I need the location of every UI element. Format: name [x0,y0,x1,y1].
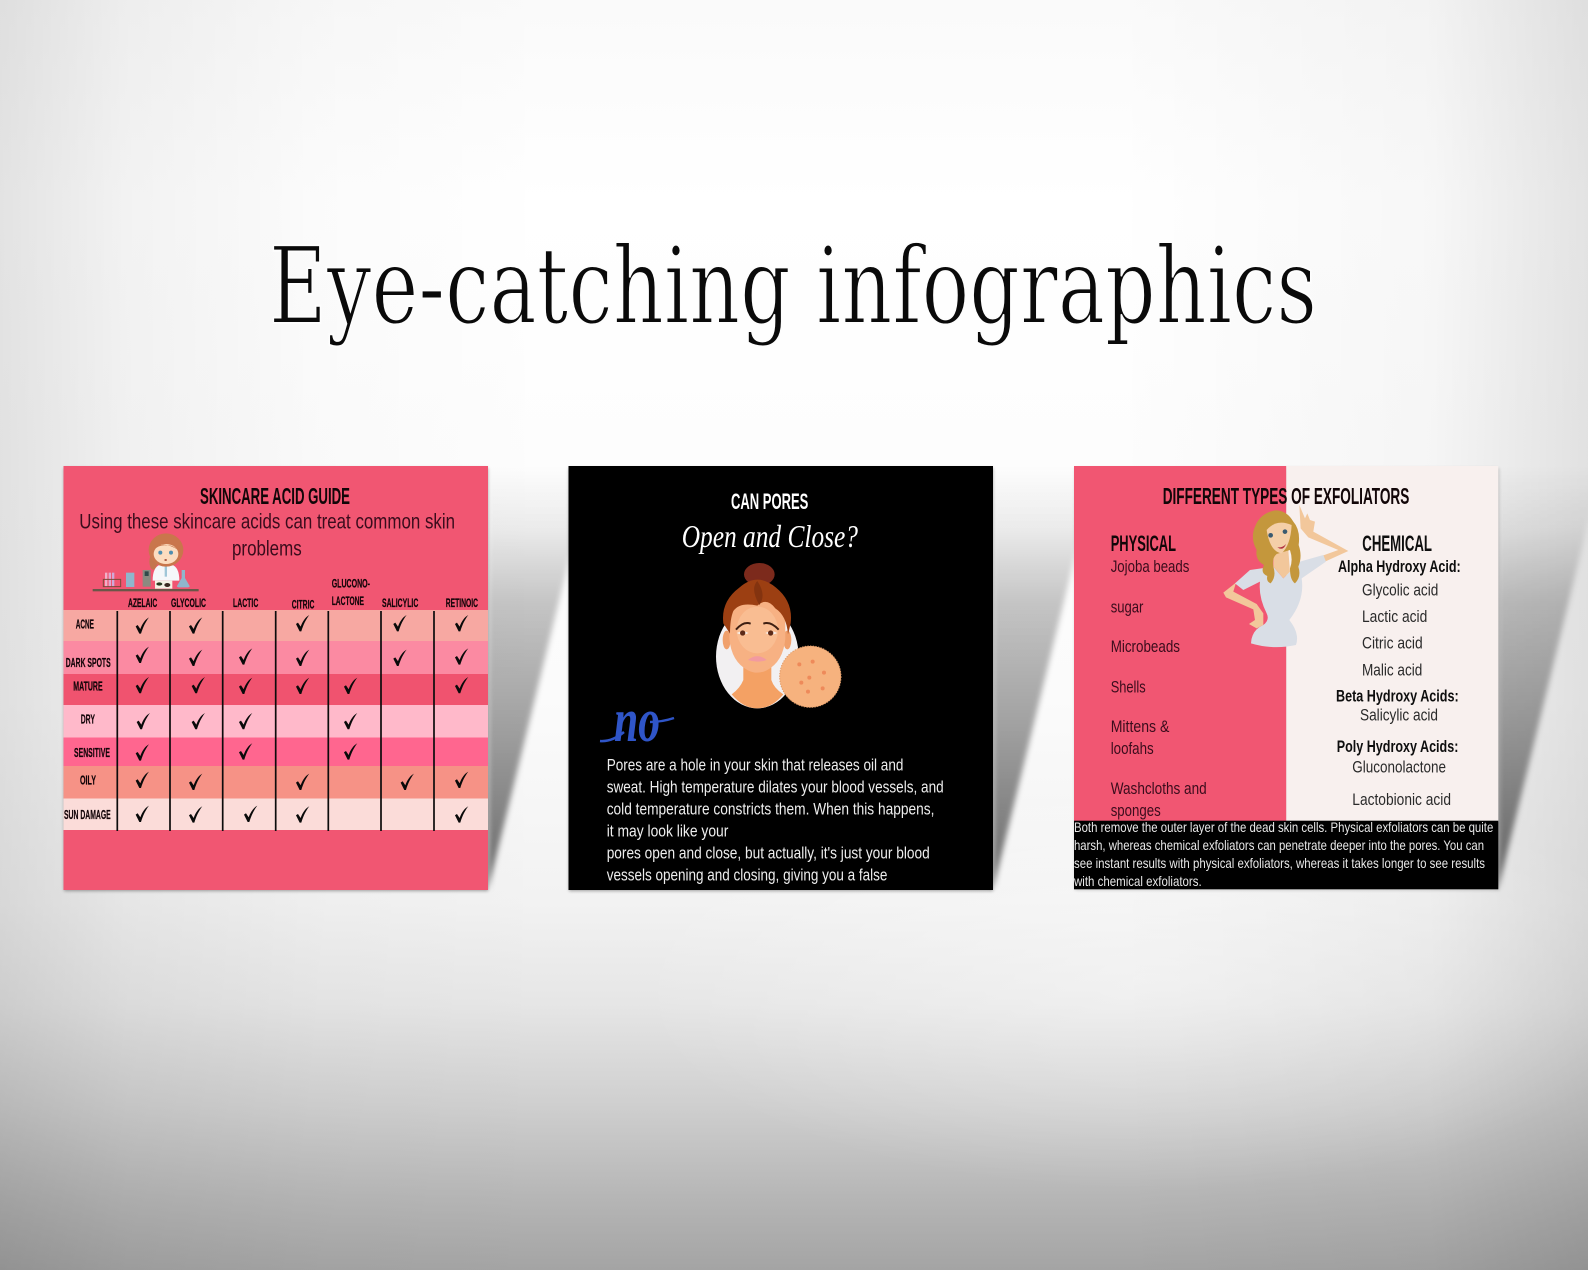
body text: pores open and close, but actually, it's just your blood [607,844,930,863]
physical column: Jojoba beads [1111,557,1189,576]
row labels [64,617,111,822]
body text: cold temperature constricts them. When this happens, [607,800,934,819]
chemical column: Poly Hydroxy Acids: [1337,737,1458,756]
physical column: Washcloths and [1111,779,1207,798]
physical column: sponges [1111,801,1161,820]
physical column [1111,531,1207,820]
column headers: AZELAIC [128,596,157,610]
physical column: PHYSICAL [1111,531,1176,556]
physical column: sugar [1111,597,1144,616]
panel heading: CAN PORES [731,489,808,514]
body text: vessels opening and closing, giving you a false [607,866,887,885]
column headers: RETINOIC [446,596,478,610]
row labels: SENSITIVE [74,746,110,760]
panel: skincare acid guide [64,466,488,891]
panel heading: DIFFERENT TYPES OF EXFOLIATORS [1163,483,1409,509]
chemical column: Beta Hydroxy Acids: [1336,686,1459,705]
panel subtitle [79,510,455,561]
footer text: see instant results with physical exfoliators, whereas it takes longer to see results [1074,855,1485,871]
blue script "no": no [614,687,660,755]
row labels: DARK SPOTS [66,656,111,670]
panel: types of exfoliators [1073,466,1499,890]
panel: can pores open and close [568,466,993,891]
column headers: GLUCONO- [332,577,370,591]
chemical column: CHEMICAL [1362,531,1432,556]
physical column: Shells [1111,677,1146,696]
panel shadows [488,466,1588,890]
chemical column: Malic acid [1362,660,1422,679]
chemical column: Lactobionic acid [1352,790,1451,809]
panel heading: SKINCARE ACID GUIDE [200,483,350,509]
physical column: Mittens & [1111,717,1170,736]
column headers: GLYCOLIC [171,596,206,610]
chemical column: Lactic acid [1362,607,1427,626]
column headers: LACTONE [332,594,364,608]
column headers: CITRIC [292,598,315,612]
row labels: OILY [80,773,96,787]
chemical column: Citric acid [1362,634,1423,653]
table rows [64,610,488,830]
column headers [128,577,478,612]
column headers: LACTIC [233,596,258,610]
check marks [136,615,468,823]
physical column: loofahs [1111,739,1154,758]
footer text [1073,819,1493,889]
panel subtitle: Using these skincare acids can treat common skin [79,510,455,533]
row labels: SUN DAMAGE [64,808,111,822]
footer text: with chemical exfoliators. [1073,873,1202,889]
script subtitle: Open and Close? [682,518,858,554]
body text [607,756,944,885]
chemical column: Salicylic acid [1360,705,1438,724]
chemical column: Alpha Hydroxy Acid: [1338,557,1461,576]
footer text: harsh, whereas chemical exfoliators can penetrate deeper into the pores. You can [1074,837,1484,853]
footer text: Both remove the outer layer of the dead skin cells. Physical exfoliators can be quite [1074,819,1493,835]
row labels: DRY [81,713,95,727]
row labels: MATURE [73,679,103,693]
body text: Pores are a hole in your skin that releases oil and [607,756,903,775]
icon: pointing woman [1223,505,1348,647]
body text: it may look like your [607,822,729,841]
row labels: ACNE [76,617,94,631]
panel subtitle: problems [232,538,302,561]
body text: sweat. High temperature dilates your blood vessels, and [607,778,944,797]
column headers: SALICYLIC [382,596,418,610]
icon: woman's face with skin close-up [716,563,841,708]
icon: scientist at lab bench [93,533,199,591]
chemical column: Glycolic acid [1362,581,1438,600]
chemical column [1336,531,1461,809]
physical column: Microbeads [1111,637,1180,656]
chemical column: Gluconolactone [1352,758,1446,777]
